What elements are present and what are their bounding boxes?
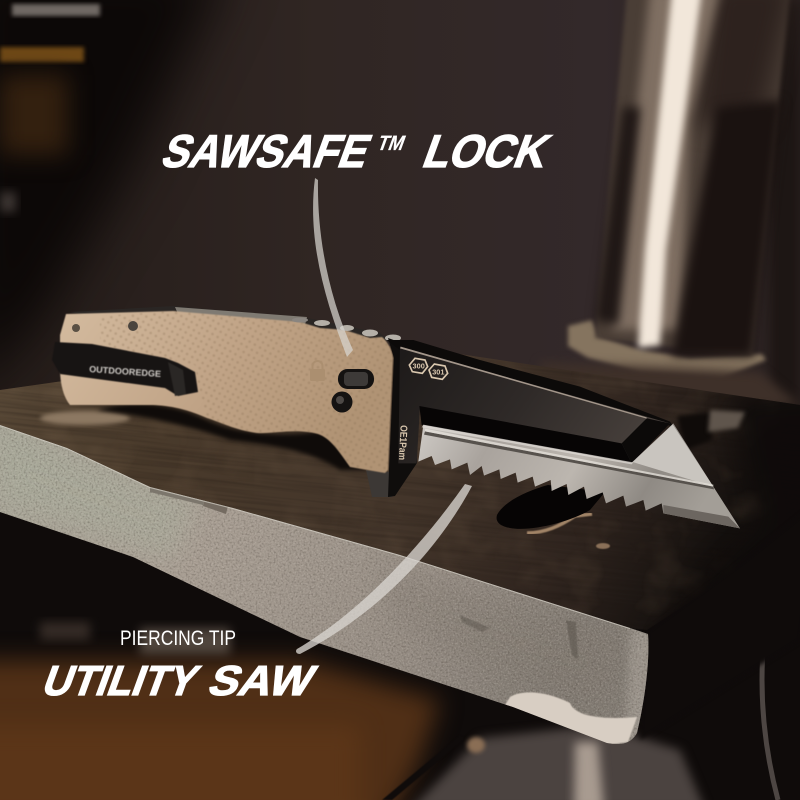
column upper right shade (695, 0, 795, 125)
handle grip texture (100, 311, 393, 470)
heading: SawSafe Lock (155, 126, 557, 178)
heading: SawSafe Lock: LOCK (416, 126, 557, 178)
liner and pivot bottom (366, 470, 392, 497)
arrow tip face (633, 424, 713, 487)
column body (595, 0, 790, 356)
blurred blob behind blade tip (677, 410, 745, 450)
column base collar (568, 320, 766, 378)
spine highlight (400, 347, 647, 419)
blade lower dark band (419, 406, 632, 463)
column highlight (638, 0, 702, 348)
saw top highlight (422, 425, 633, 464)
column dark bands (595, 107, 640, 325)
spine studs (292, 318, 401, 342)
heading: SawSafe Lock: TM (374, 131, 409, 155)
saw groove (424, 431, 714, 489)
heading: utility saw (37, 658, 322, 705)
blade and saw, drawn in zoom coordinates: 300 (413, 361, 425, 370)
clip logo: OUTDOOREDGE (89, 364, 161, 379)
black blade (398, 347, 670, 463)
plate top surface (0, 345, 800, 630)
steel code: OE1Pam (396, 425, 409, 460)
lock slider (338, 369, 374, 389)
heading: SawSafe Lock: SAWSAFE (155, 126, 378, 178)
label: piercing tip: PIERCING TIP (120, 627, 236, 650)
plate face texture (0, 420, 660, 750)
knife shadow on plate (97, 404, 385, 480)
handle scale (60, 311, 393, 473)
saw edge bevel (663, 505, 740, 528)
back spine (70, 306, 388, 345)
plate slot (497, 485, 605, 529)
dark right side of plate (640, 500, 800, 740)
heading: utility saw: UTILITY (37, 658, 205, 705)
blade bevel (622, 418, 670, 463)
column mid tone beside highlight (612, 0, 720, 330)
background: floor and lower shadows (0, 500, 800, 800)
saw blade (418, 423, 740, 528)
knife (52, 306, 740, 528)
arrow: pointer to saw (296, 484, 472, 654)
serrated spine shadow (387, 340, 673, 427)
lock icon (310, 361, 325, 381)
plate front face (0, 425, 648, 744)
blade and saw, drawn in zoom coordinates: 301 (432, 367, 444, 376)
bolster (388, 338, 418, 497)
heading: utility saw: SAW (203, 658, 322, 705)
blade and saw, drawn in zoom coordinates (387, 340, 740, 528)
pivot screw (332, 392, 352, 412)
maker marks (409, 358, 448, 379)
steel column, top right (540, 0, 800, 412)
handle pins (72, 321, 138, 332)
arrow: pointer to lock (313, 178, 353, 357)
metal plate (0, 234, 800, 750)
plate top scratches and stains (0, 380, 785, 612)
pocket clip (52, 342, 198, 396)
